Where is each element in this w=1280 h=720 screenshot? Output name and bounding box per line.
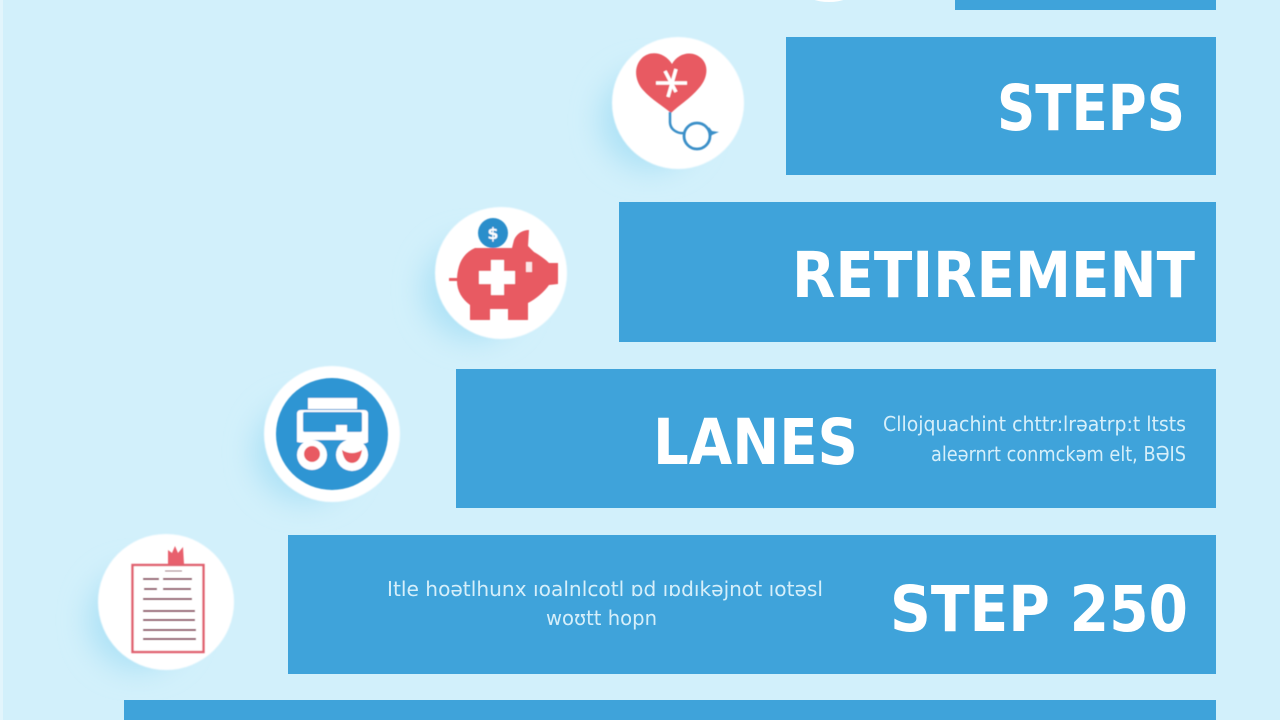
icon: top circle fragment <box>805 0 853 2</box>
text block: lanes description: aleərnrt conmckəm elt, BƏIS <box>931 442 1186 466</box>
icon: heart with stethoscope <box>600 37 744 170</box>
icon: piggy bank: $ <box>487 224 499 243</box>
text block: lanes description <box>883 412 1186 466</box>
heading: retirement: RETIREMENT <box>792 239 1195 312</box>
heading: lanes: LANES <box>653 406 858 479</box>
text block: lanes description: Cllojquachint chttr:lrəatrp:t ltsts <box>883 412 1186 436</box>
panel: lanes bar <box>456 369 1216 508</box>
panel: step 250 bar <box>288 535 1216 674</box>
panel: bottom step bar <box>124 700 1216 720</box>
panel: retirement bar <box>619 202 1216 342</box>
panel: top step bar <box>955 0 1216 10</box>
icon: blue badge with two gauges <box>254 366 400 502</box>
icon: piggy bank <box>423 207 567 340</box>
icon: clipboard document <box>88 534 234 670</box>
panel: steps bar <box>786 37 1216 175</box>
heading: steps: STEPS <box>997 72 1185 145</box>
text block: step 250 description <box>387 577 823 630</box>
text block: step 250 description: Itle hoətlhunx ıoalnlcotl ɒd ıɒdıkəjnot ıotəsl <box>387 577 823 601</box>
text block: step 250 description: woʊtt hopn <box>546 606 657 630</box>
heading: step 250: STEP 250 <box>890 573 1188 646</box>
